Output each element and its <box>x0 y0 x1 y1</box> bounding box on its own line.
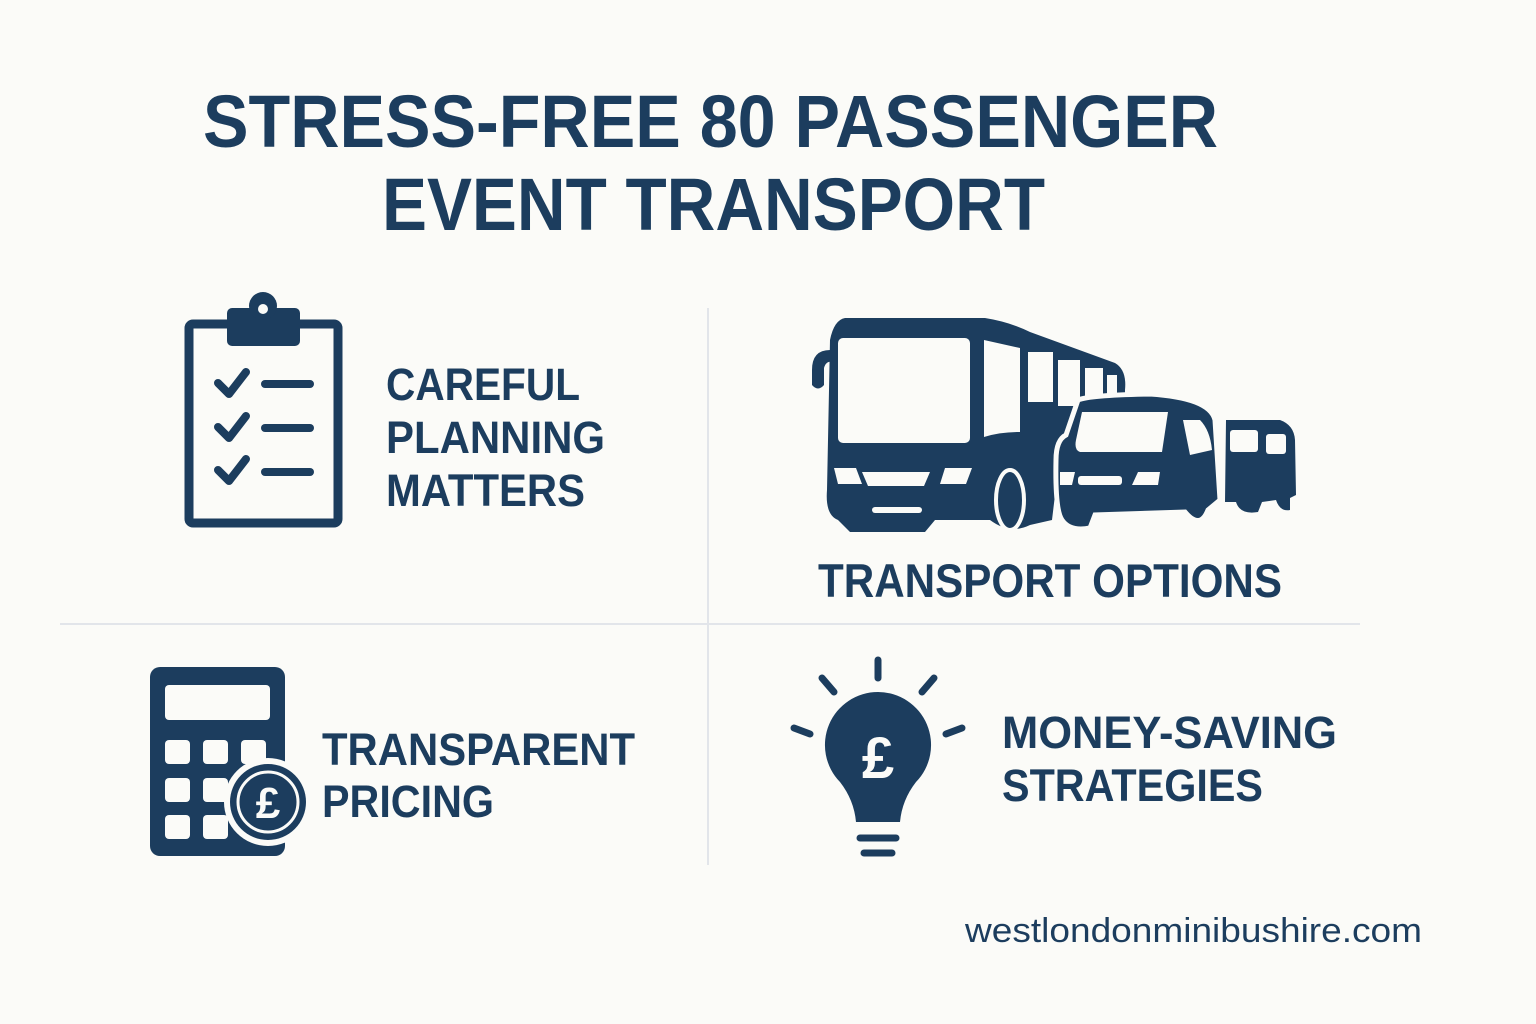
text: careful planning matters <box>386 359 605 516</box>
icon: calculator <box>150 667 312 856</box>
icon: vehicles <box>812 318 1296 532</box>
text: money-saving strategies <box>1002 707 1337 811</box>
panel: money-saving strategies <box>794 660 1337 853</box>
panel: careful planning <box>189 292 605 523</box>
text: money-saving strategies: STRATEGIES <box>1002 760 1263 811</box>
icon: clipboard <box>189 292 338 523</box>
title: EVENT TRANSPORT <box>382 163 1045 246</box>
text: transparent pricing: TRANSPARENT <box>322 724 635 775</box>
text: careful planning matters: PLANNING <box>386 412 605 463</box>
bus <box>827 318 1125 532</box>
text: careful planning matters: MATTERS <box>386 465 585 516</box>
small van <box>1225 420 1296 513</box>
icon: calculator: £ <box>256 779 281 828</box>
text: transparent pricing <box>322 724 635 827</box>
panel: transport options <box>812 318 1296 607</box>
icon: light bulb: £ <box>862 726 894 791</box>
title <box>203 80 1218 246</box>
icon: light bulb <box>794 660 962 853</box>
panel: transparent pricing <box>150 667 635 856</box>
text: careful planning matters: CAREFUL <box>386 359 580 410</box>
text: transport options: TRANSPORT OPTIONS <box>818 554 1282 607</box>
title: STRESS-FREE 80 PASSENGER <box>203 80 1218 163</box>
footer url: westlondonminibushire.com <box>964 912 1422 950</box>
text: money-saving strategies: MONEY-SAVING <box>1002 707 1337 758</box>
van <box>1056 394 1220 529</box>
text: transparent pricing: PRICING <box>322 776 494 827</box>
